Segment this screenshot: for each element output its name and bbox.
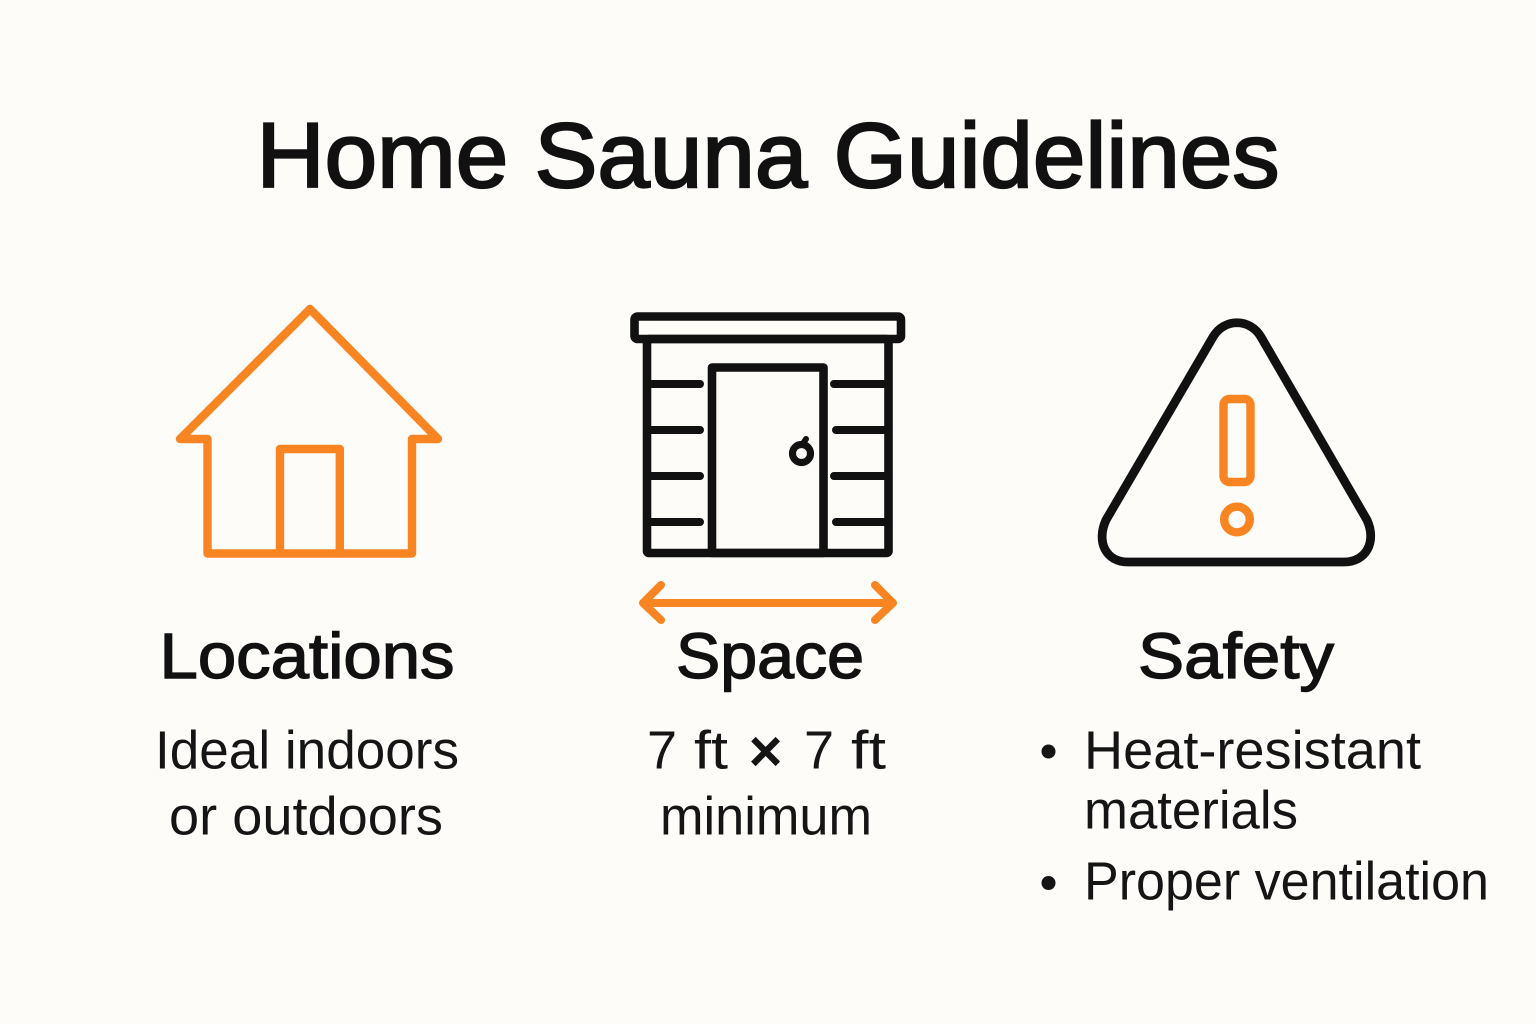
- list: safety items: Proper ventilation: [1084, 852, 1489, 912]
- title: Home Sauna Guidelines: [256, 105, 1280, 207]
- text: locations description: or outdoors: [169, 786, 443, 846]
- text: space description: ×: [749, 719, 782, 784]
- heading: safety: Safety: [1138, 620, 1334, 692]
- text: locations description: [155, 720, 459, 846]
- icon: house: [180, 309, 438, 554]
- heading: locations: Locations: [160, 620, 454, 692]
- text: space description: 7: [647, 720, 677, 780]
- icon: warning triangle: [1102, 323, 1371, 562]
- list: safety items: [1042, 720, 1489, 912]
- text: space description: minimum: [660, 786, 872, 846]
- list: safety items: materials: [1084, 780, 1298, 840]
- text: space description: [647, 719, 886, 846]
- heading: space: Space: [676, 620, 864, 692]
- text: locations description: Ideal indoors: [155, 720, 459, 780]
- text: space description: ft: [694, 720, 728, 780]
- list: safety items: Heat-resistant: [1084, 720, 1421, 780]
- text: space description: ft: [851, 720, 886, 780]
- text: space description: 7: [804, 720, 834, 780]
- icon: sauna cabin: [634, 316, 901, 553]
- icon: width arrow: [643, 585, 893, 620]
